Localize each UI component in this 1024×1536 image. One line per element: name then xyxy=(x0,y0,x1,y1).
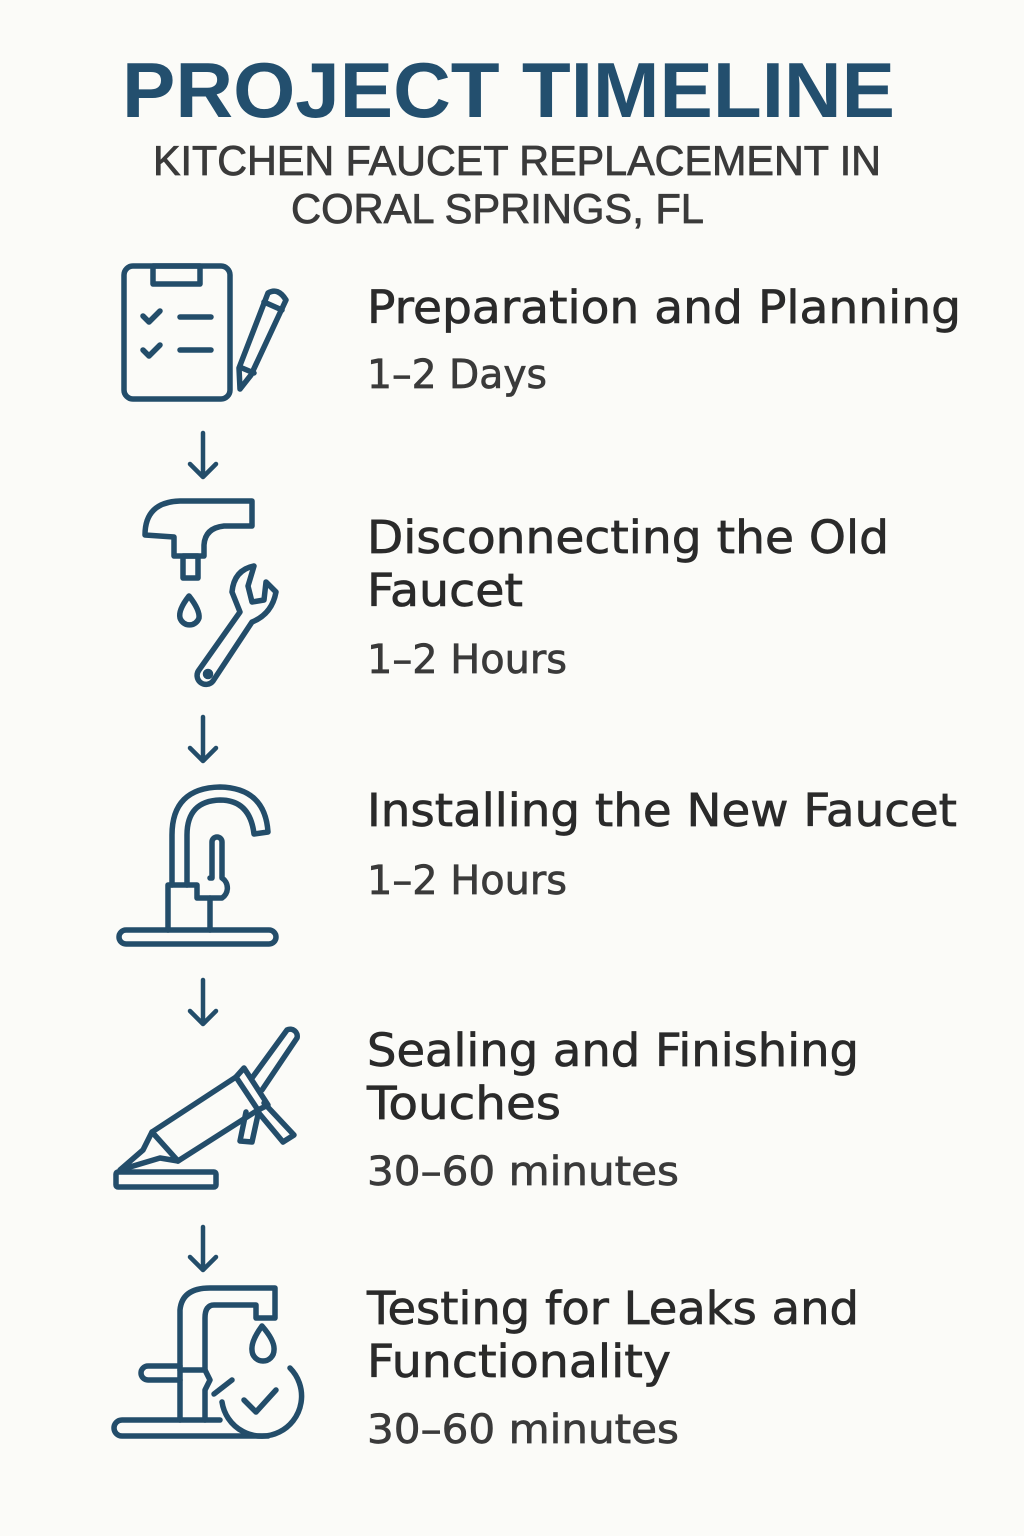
arrow 2 xyxy=(190,717,216,761)
icon: faucet head with wrench xyxy=(145,501,276,684)
icon: new faucet xyxy=(119,787,276,944)
step 1 text xyxy=(367,281,961,398)
step 2 text xyxy=(367,511,889,683)
icon: clipboard and pencil xyxy=(124,266,286,399)
step 4 text: 30–60 minutes xyxy=(367,1149,679,1195)
step 2 text: Faucet xyxy=(367,564,523,617)
step 3 text: 1–2 Hours xyxy=(367,858,567,904)
step 5 text: 30–60 minutes xyxy=(367,1407,679,1453)
arrow 4 xyxy=(190,1227,216,1270)
step 4 text xyxy=(366,1024,859,1195)
icon: caulk gun xyxy=(116,1029,297,1187)
subtitle: KITCHEN FAUCET REPLACEMENT IN xyxy=(153,137,881,184)
step 3 text: Installing the New Faucet xyxy=(367,784,957,837)
step 5 text: Functionality xyxy=(367,1335,671,1388)
step 1 text: 1–2 Days xyxy=(367,352,547,398)
subtitle xyxy=(153,137,881,232)
step 2 text: Disconnecting the Old xyxy=(367,511,889,564)
step 1 text: Preparation and Planning xyxy=(367,281,961,334)
step 5 text xyxy=(366,1282,859,1453)
step 2 text: 1–2 Hours xyxy=(367,637,567,683)
title: PROJECT TIMELINE xyxy=(122,46,895,134)
step 4 text: Sealing and Finishing xyxy=(367,1024,859,1077)
subtitle: CORAL SPRINGS, FL xyxy=(291,185,704,232)
step 3 text xyxy=(367,784,957,904)
icon: faucet with check xyxy=(114,1288,302,1436)
step 4 text: Touches xyxy=(366,1077,561,1130)
step 5 text: Testing for Leaks and xyxy=(366,1282,859,1335)
arrow 1 xyxy=(190,433,216,477)
arrow 3 xyxy=(190,980,216,1024)
